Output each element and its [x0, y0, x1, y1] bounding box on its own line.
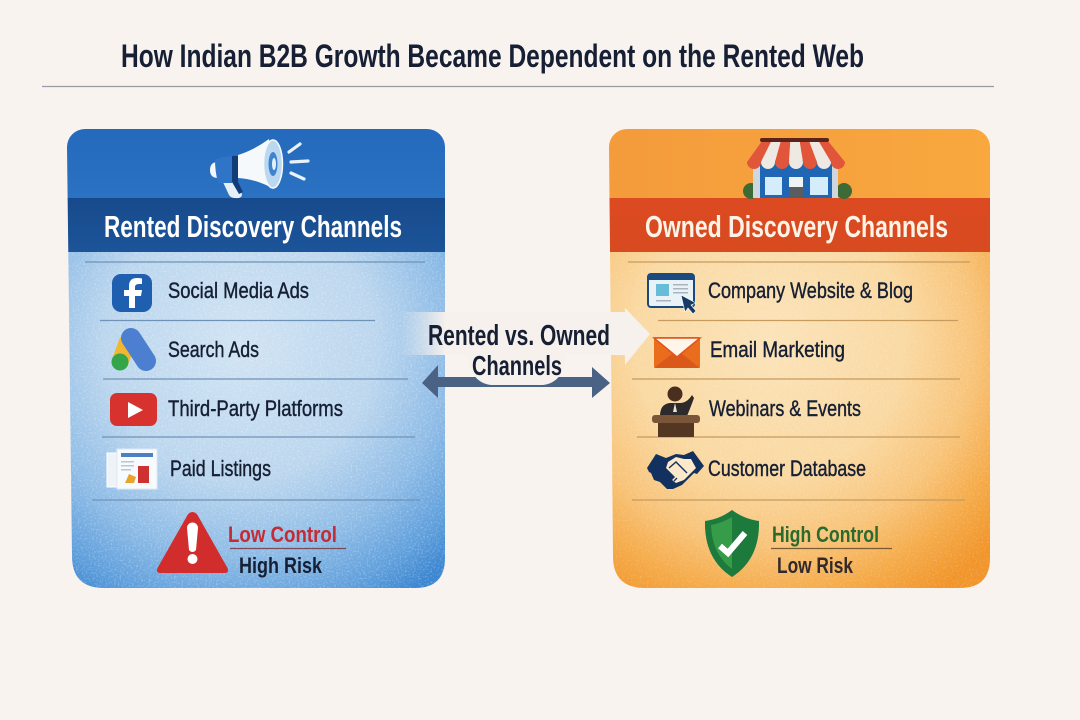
icon: paid listings [107, 449, 157, 489]
text: webinars and events: Webinars & Events [709, 396, 861, 421]
text: high control: High Control [772, 522, 879, 547]
text: search ads: Search Ads [168, 337, 259, 362]
icon: handshake [647, 451, 704, 489]
text: low control: Low Control [228, 522, 337, 547]
text: third-party platforms: Third-Party Platforms [168, 396, 343, 421]
double-headed arrow [422, 365, 610, 398]
text: company website and blog: Company Website & Blog [708, 278, 913, 303]
text: email marketing: Email Marketing [710, 337, 845, 362]
text: high risk: High Risk [239, 553, 323, 578]
heading: rented discovery channels: Rented Discovery Channels [104, 209, 402, 244]
text: paid listings: Paid Listings [170, 456, 271, 481]
icon: storefront [743, 138, 852, 199]
icon: video play [110, 393, 157, 426]
text: low risk: Low Risk [777, 553, 854, 578]
text: rented vs owned: Rented vs. Owned [428, 320, 610, 352]
text: customer database: Customer Database [708, 456, 866, 481]
heading: owned discovery channels: Owned Discovery Channels [645, 209, 948, 244]
callout: rented vs owned channels [400, 308, 650, 398]
panel: owned discovery channels [600, 125, 995, 591]
icon: website window [648, 274, 696, 314]
icon: speaker at podium [652, 386, 700, 437]
icon: facebook [112, 274, 152, 312]
icon: google ads [112, 338, 146, 370]
text: channels: Channels [472, 350, 562, 381]
icon: envelope [654, 337, 700, 368]
title: How Indian B2B Growth Became Dependent on the Rented Web [121, 38, 864, 74]
icon: megaphone [210, 139, 308, 198]
icon: shield check [705, 510, 759, 577]
icon: warning triangle [157, 512, 228, 573]
panel: rented discovery channels [60, 125, 450, 591]
text: social media ads: Social Media Ads [168, 278, 309, 303]
banner arrow [446, 308, 650, 365]
